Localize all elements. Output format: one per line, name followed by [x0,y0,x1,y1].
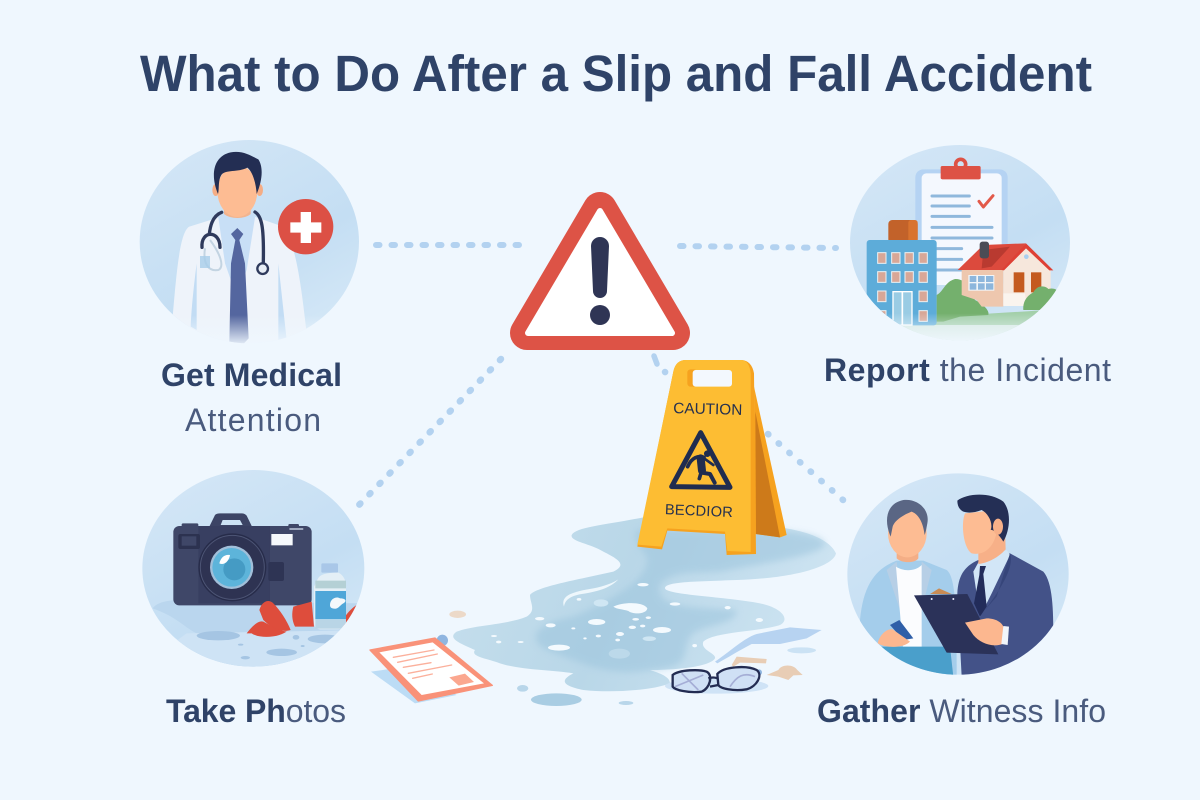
tan debris [732,657,803,680]
label: take photos: Take Photos [166,693,346,729]
handle hole [687,369,732,387]
witness left person [860,500,957,677]
icon: warning triangle [527,209,673,333]
circle bottom fade [139,140,359,344]
doctor head [217,165,257,217]
medical cross badge [278,199,333,254]
label: get medical attention: Get Medical [161,357,342,393]
lighter swirl shapes [563,579,618,607]
floor shadows [153,600,363,670]
white water spots [491,583,763,651]
witness right person [957,495,1053,677]
stethoscope [202,212,268,274]
label: report the incident: Report the Incident [824,352,1111,388]
phone and hand [890,620,913,640]
splash puddles [197,631,342,659]
icon: doctor circle [139,140,359,347]
doctor shirt and neck [218,216,255,280]
title: What to Do After a Slip and Fall Accident [140,45,1092,102]
sign front face [637,360,756,555]
label: get medical attention [161,357,342,438]
doctor coat [173,216,307,347]
dotted connectors [357,245,851,507]
water puddle [449,517,836,706]
bush right [1023,286,1059,310]
witness clipboard [914,588,998,654]
icon: camera circle [137,470,364,670]
clipboard [915,159,1008,285]
sign lower text: BECDIOR [665,502,733,521]
deeper water [536,530,825,672]
label: gather witness info: Gather Witness Info [817,693,1106,729]
dropped document [370,635,492,703]
eyeglasses [665,667,768,694]
slip hazard pictogram [672,433,730,487]
icon: wet floor caution sign [637,360,787,555]
small droplets [449,611,816,706]
caution text: CAUTION [673,400,742,419]
icon: witnesses circle [847,473,1069,677]
icon: report incident circle [850,145,1070,348]
doctor hair [214,152,262,194]
right person hair [957,495,1009,542]
red debris [247,601,360,637]
circle bottom fade [850,145,1070,341]
sign back leg [754,387,787,537]
blue paper scrap [715,627,822,663]
ground [902,310,1039,332]
writing hand [965,618,1004,645]
bush [937,279,989,322]
office building [867,220,937,325]
label: get medical attention: Attention [185,402,321,438]
doctor tie [229,228,249,344]
camera [173,513,312,605]
water bottle [314,563,346,629]
house [958,242,1053,307]
